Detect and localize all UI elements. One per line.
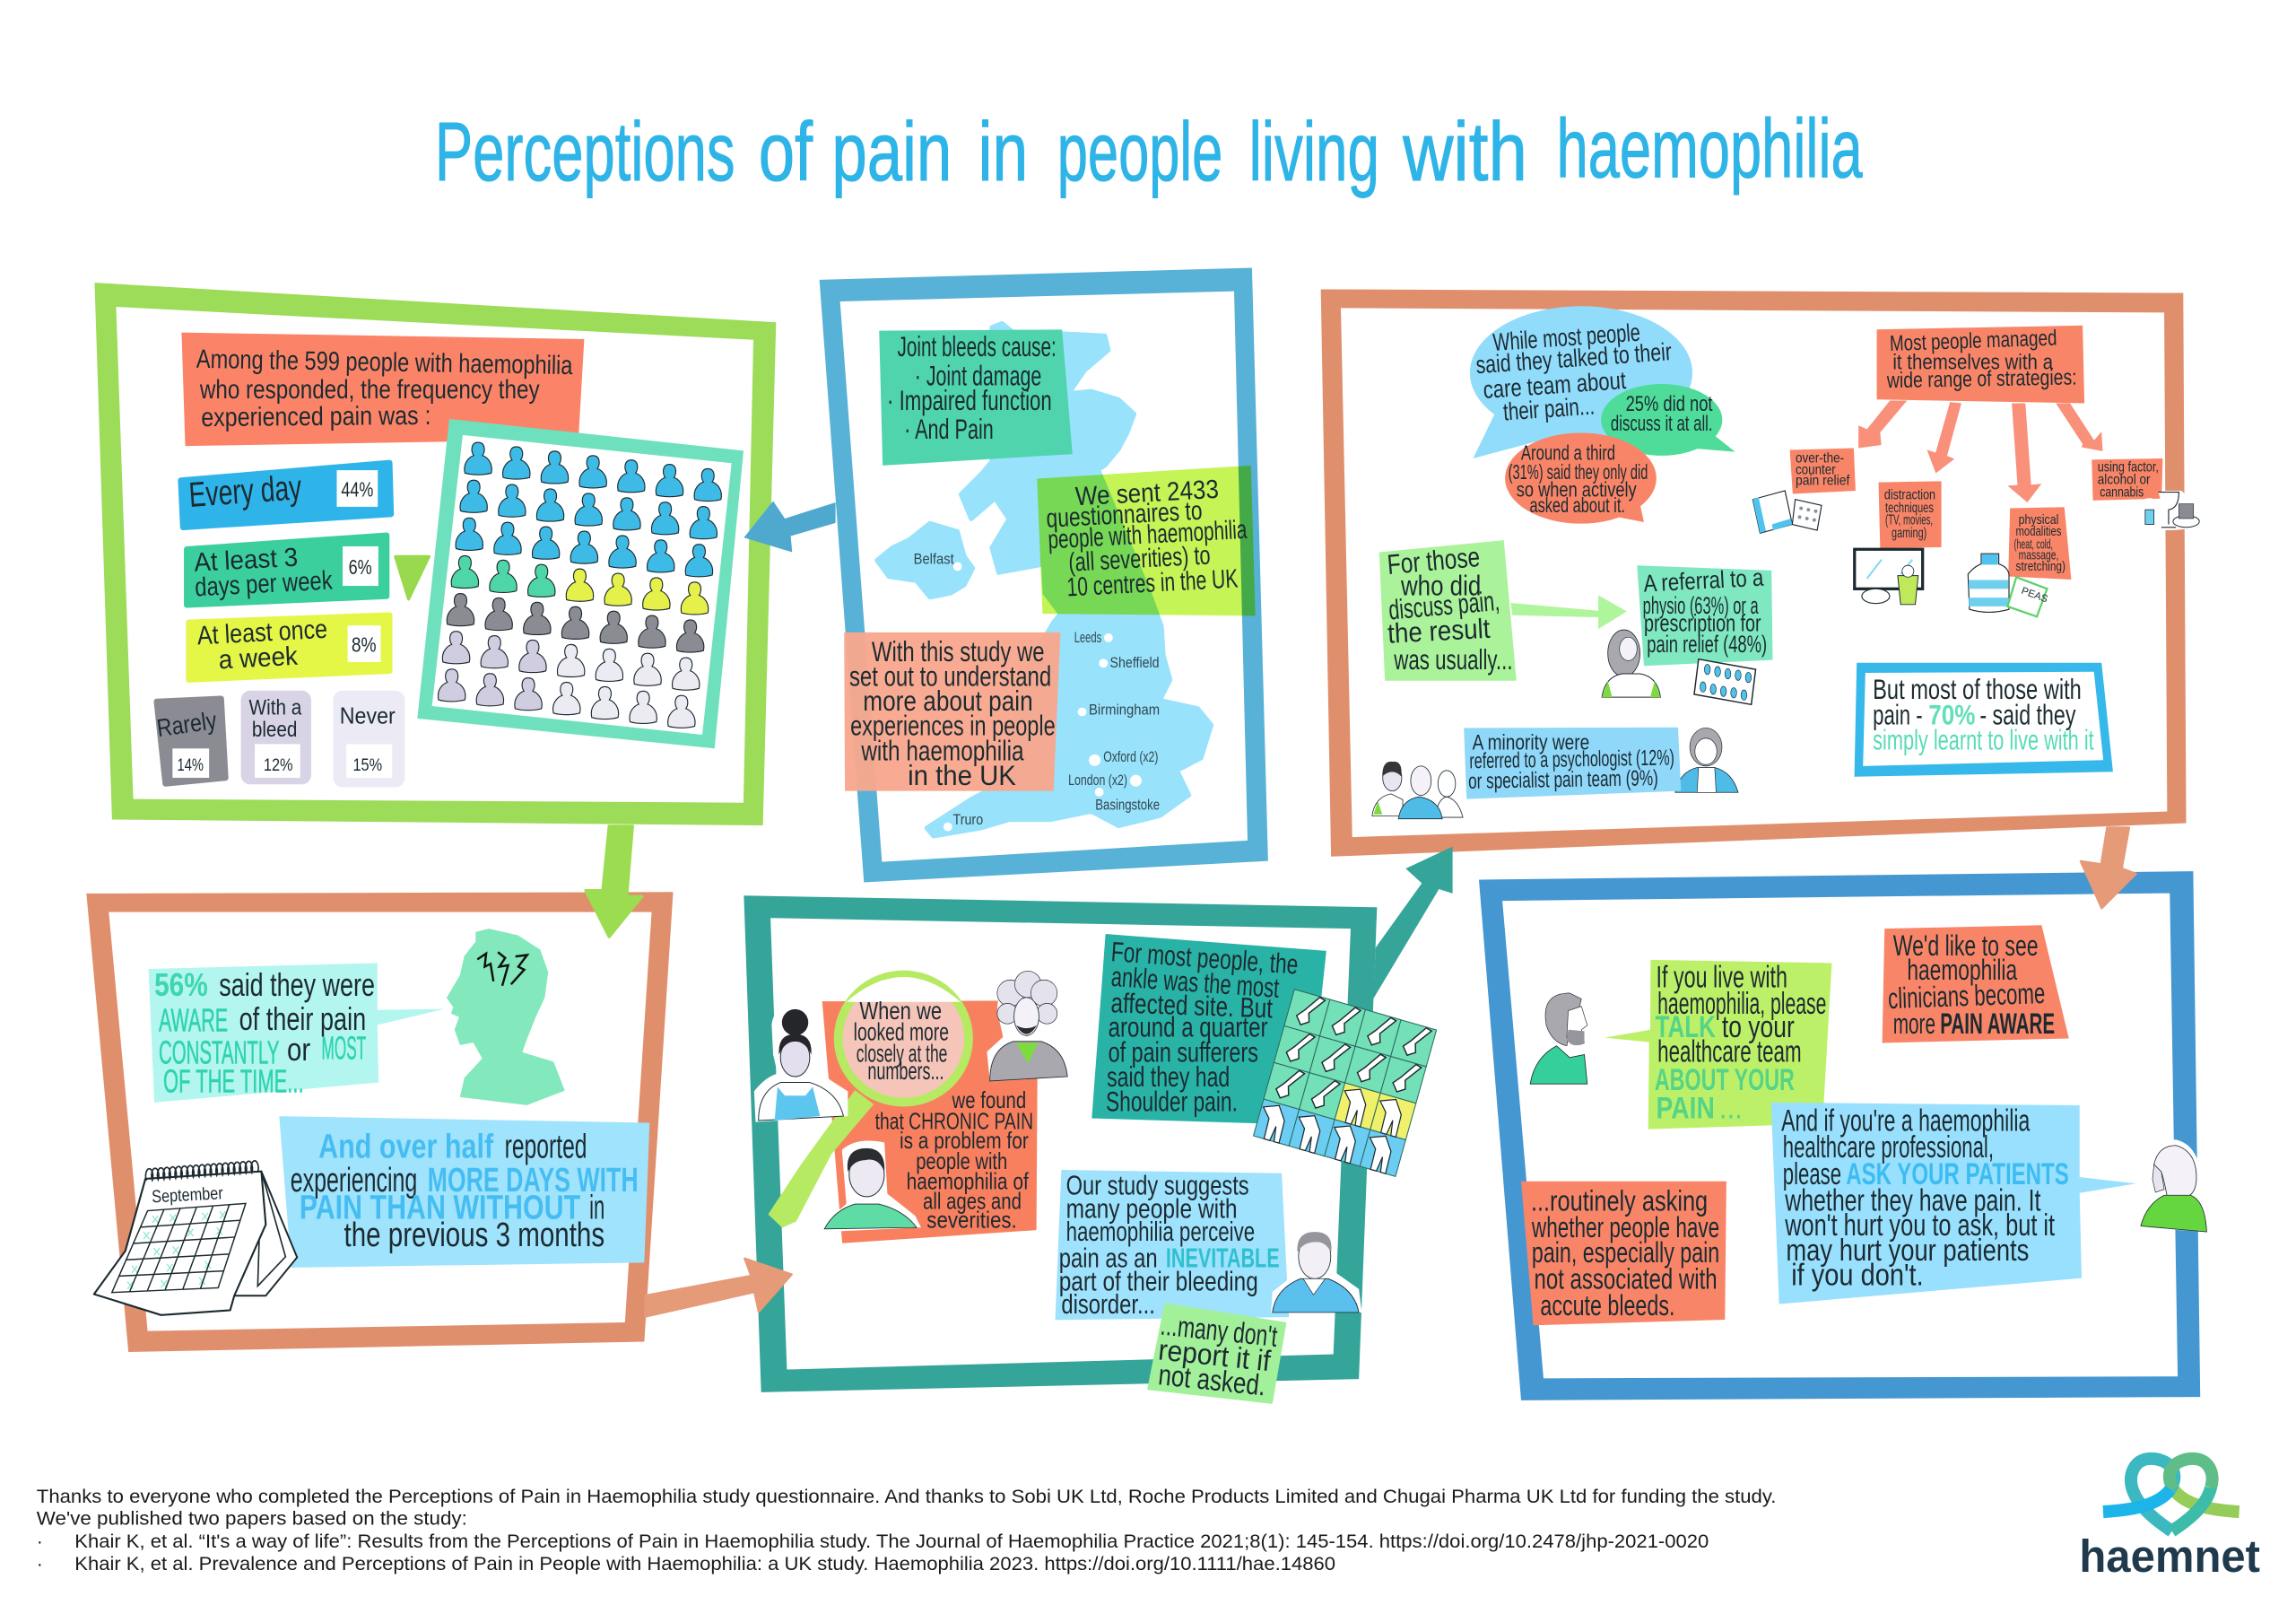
legend: never 15% — [335, 693, 403, 785]
map centres and labels: Oxford (x2) — [1103, 749, 1158, 765]
speech note: ask your patients: healthcare professional, — [1783, 1130, 1994, 1164]
speech bubble: a third when asked: Around a third — [1521, 441, 1615, 464]
speech note: talk to your healthcare team: PAIN — [1657, 1092, 1715, 1126]
note: questionnaires sent: (all severities) to — [1067, 540, 1211, 578]
note: chronic pain: people with — [916, 1147, 1007, 1174]
note: ankle most affected: For most people, the — [1110, 936, 1300, 981]
icon: medicine box and blister — [1752, 491, 1822, 533]
note: many don't report — [1147, 1303, 1286, 1404]
speech note: talk to your healthcare team — [1605, 960, 1831, 1130]
note: routinely asking: pain, especially pain — [1532, 1235, 1719, 1269]
note: for those who did discuss: For those — [1386, 541, 1481, 580]
footer: acknowledgements and references: · — [37, 1531, 43, 1552]
logo: haemnet: haemnet — [2079, 1531, 2260, 1582]
strategy: physical modalities: physical — [2019, 513, 2058, 528]
note: 56% aware of pain: AWARE — [159, 1001, 228, 1038]
note: chronic pain: all ages and — [923, 1187, 1022, 1214]
icon: magnifying glass: closely at the — [857, 1039, 947, 1067]
note: questionnaires sent — [1037, 466, 1256, 615]
speech bubble: 25% did not discuss — [1601, 384, 1735, 456]
note: study aim: in the UK — [908, 760, 1016, 791]
note: chronic pain: that CHRONIC PAIN — [875, 1107, 1033, 1134]
note: questionnaires sent: We sent 2433 — [1074, 475, 1220, 511]
speech bubble: most talked to care team: care team about — [1483, 366, 1627, 404]
strategy: distraction: distraction — [1884, 488, 1935, 503]
legend: rarely 14% — [155, 699, 225, 783]
note: minority referred: referred to a psychologist (12%) — [1469, 746, 1674, 773]
icon: magnifying glass: numbers... — [867, 1057, 944, 1085]
legend: every day 44%: Every day — [187, 468, 303, 515]
note: more days with pain: the previous 3 months — [344, 1216, 604, 1253]
strategy: factor alcohol cannabis: using factor, — [2098, 459, 2159, 475]
speech note: talk to your healthcare team: TALK — [1656, 1010, 1716, 1044]
strategy: physical modalities — [2008, 507, 2071, 580]
note: for those who did discuss: the result — [1387, 613, 1492, 650]
icon: vial wine plate — [2136, 491, 2201, 530]
note: 56% aware of pain: said they were — [219, 966, 375, 1003]
footer: acknowledgements and references: · — [37, 1554, 43, 1574]
small pointer triangle — [396, 556, 429, 599]
speech note: talk to your healthcare team: to your — [1722, 1010, 1795, 1044]
sticker: three healthcare workers — [1370, 759, 1467, 819]
note: referral to physio: physio (63%) or a — [1643, 592, 1759, 619]
note: 56% aware of pain: of their pain — [239, 1000, 366, 1037]
map centres and labels: Birmingham — [1089, 702, 1160, 719]
speech bubble: most talked to care team: While most people — [1492, 318, 1641, 356]
icon: hot water bottle and peas: PEAS — [2020, 586, 2049, 606]
chart: joints affected grid — [1254, 990, 1437, 1176]
icon: blister pack — [1694, 659, 1756, 704]
note: pain inevitable: haemophilia perceive — [1066, 1217, 1255, 1247]
note: ankle most affected: around a quarter — [1109, 1012, 1268, 1043]
map centres and labels: Leeds — [1074, 630, 1101, 646]
map centres and labels — [914, 552, 1160, 832]
sticker: woman in profile — [2138, 1139, 2206, 1232]
speech note: talk to your healthcare team: ABOUT YOUR — [1655, 1063, 1795, 1097]
note: joint bleeds cause: · And Pain — [904, 414, 994, 445]
title: with — [1402, 105, 1527, 198]
legend: rarely 14%: Rarely — [155, 706, 219, 742]
arrow: to factor alcohol cannabis — [2056, 403, 2102, 451]
note: referral to physio: pain relief (48%) — [1647, 631, 1767, 658]
note: chronic pain: haemophilia of — [907, 1168, 1029, 1195]
text: frequency intro: who responded, the frequency they — [199, 375, 540, 405]
title — [435, 102, 1863, 198]
note: referral to physio: A referral to a — [1643, 564, 1764, 598]
strategy: factor alcohol cannabis: cannabis — [2100, 484, 2144, 500]
strategy: physical modalities: massage, — [2019, 549, 2058, 563]
legend: with a bleed 12%: With a — [249, 697, 302, 720]
note: 56% aware of pain: OF THE TIME... — [163, 1062, 304, 1099]
note: 56% aware of pain: MOST — [322, 1029, 366, 1066]
note: more days with pain: reported — [505, 1128, 587, 1165]
sticker: man in blue sweater — [1271, 1229, 1361, 1313]
sticker: man with curly hair — [987, 970, 1070, 1081]
note: ankle most affected: Shoulder pain. — [1106, 1086, 1238, 1118]
logo: haemnet — [2079, 1459, 2260, 1582]
note: minority referred: or specialist pain team (9%) — [1468, 766, 1658, 794]
arrow: chronic pain to talking — [1373, 847, 1453, 999]
note: more days with pain: MORE DAYS WITH — [428, 1161, 639, 1199]
panel: pain frequency — [94, 283, 776, 825]
speech note: ask your patients: won't hurt you to ask, but it — [1784, 1208, 2055, 1243]
callout: 70% learnt to live with it: pain - — [1873, 699, 1923, 730]
legend: every day 44% — [181, 463, 391, 528]
note: ankle most affected: affected site. But — [1110, 987, 1274, 1025]
note: joint bleeds cause: · Joint damage — [915, 360, 1041, 391]
note: ankle most affected: said they had — [1107, 1061, 1230, 1093]
panel: awareness of pain — [86, 892, 674, 1352]
note: more days with pain — [279, 1116, 649, 1268]
speech bubble: 25% did not discuss: 25% did not — [1626, 392, 1713, 416]
icon: hot water bottle and peas — [1968, 554, 2049, 616]
arrow: talking to call to action — [2081, 827, 2136, 908]
legend: at least 3 days per week 6% — [187, 536, 387, 605]
note: self-managed strategies: it themselves with a — [1892, 350, 2053, 374]
note: routinely asking: ...routinely asking — [1531, 1184, 1708, 1217]
strategy: distraction — [1879, 481, 1942, 548]
map centres and labels: Truro — [953, 812, 983, 828]
arrow: study to frequency — [744, 501, 836, 553]
note: 56% aware of pain: 56% — [154, 966, 208, 1003]
note: referral to physio: prescription for — [1644, 610, 1761, 637]
note: pain inevitable: INEVITABLE — [1166, 1244, 1280, 1274]
note: referral to physio — [1637, 564, 1772, 666]
legend: at least 3 days per week 6%: days per week — [194, 565, 334, 602]
legend: with a bleed 12%: bleed — [252, 719, 297, 742]
note: study aim: more about pain — [863, 685, 1033, 717]
note: more days with pain: in — [589, 1188, 604, 1226]
map centres and labels: Sheffield — [1110, 655, 1160, 671]
title: haemophilia — [1557, 102, 1863, 196]
strategy: distraction: (TV, movies, — [1885, 512, 1933, 528]
speech bubble: a third when asked: asked about it. — [1529, 493, 1625, 517]
icon: September calendar: September — [152, 1183, 224, 1207]
note: minority referred: A minority were — [1473, 730, 1589, 755]
strategy: physical modalities: modalities — [2016, 525, 2061, 539]
note: clinicians pain aware — [1883, 925, 2069, 1042]
text: frequency intro: experienced pain was : — [201, 401, 431, 432]
note: pain inevitable: pain as an — [1059, 1244, 1158, 1274]
arrow: to over-the-counter — [1858, 401, 1907, 448]
panel: study and UK map — [820, 267, 1268, 883]
icon: magnifying glass: When we — [859, 997, 942, 1025]
note: study aim: With this study we — [872, 636, 1045, 667]
speech note: ask your patients: ASK YOUR PATIENTS — [1846, 1157, 2069, 1191]
title: in — [978, 105, 1028, 198]
note: routinely asking: not associated with — [1535, 1262, 1718, 1295]
legend: every day 44%: 44% — [341, 477, 373, 501]
legend: at least 3 days per week 6%: At least 3 — [193, 543, 299, 578]
note: clinicians pain aware: We'd like to see — [1893, 929, 2039, 962]
note: pain inevitable — [1055, 1170, 1289, 1320]
note: many don't report: ...many don't — [1159, 1308, 1279, 1353]
note: 56% aware of pain — [149, 963, 444, 1103]
note: routinely asking: accute bleeds. — [1540, 1288, 1674, 1322]
note: minority referred — [1464, 728, 1681, 799]
note: clinicians pain aware: more — [1893, 1007, 1935, 1040]
speech note: ask your patients: may hurt your patients — [1786, 1234, 2029, 1268]
strategy: over the counter: pain relief — [1796, 473, 1850, 488]
note: more days with pain: experiencing — [291, 1161, 417, 1199]
panel: talking about pain and strategies — [1321, 289, 2201, 857]
note: joint bleeds cause: Joint bleeds cause: — [897, 331, 1057, 362]
note: ankle most affected — [1091, 934, 1326, 1125]
speech bubble: a third when asked: so when actively — [1517, 477, 1637, 501]
sticker: woman with hair bun — [754, 1007, 848, 1122]
text: frequency intro: Among the 599 people with haemophilia — [196, 345, 573, 380]
title: pain — [831, 105, 952, 198]
chart: pictogram of 49 people — [417, 419, 744, 748]
note: clinicians pain aware: PAIN AWARE — [1940, 1007, 2055, 1040]
footer: acknowledgements and references: Thanks to everyone who completed the Perceptions of Pain in Haemophilia study questionnaire. And thanks to Sobi UK Ltd, Roche Products Limited and Chugai Pharma UK Ltd for funding the study. — [37, 1487, 1776, 1507]
legend: at least 3 days per week 6%: 6% — [349, 555, 372, 579]
legend: at least once a week 8%: At least once — [196, 615, 328, 650]
map centres and labels: London (x2) — [1068, 772, 1127, 789]
note: questionnaires sent: 10 centres in the UK — [1066, 564, 1239, 602]
legend: with a bleed 12% — [243, 693, 309, 782]
callout: 70% learnt to live with it: But most of those with — [1873, 674, 2082, 705]
speech bubble: most talked to care team — [1470, 306, 1692, 458]
sticker: man with short dark hair — [824, 1140, 921, 1232]
note: routinely asking — [1521, 1182, 1726, 1325]
legend: with a bleed 12%: 12% — [264, 755, 293, 775]
icon: magnifying glass — [768, 975, 969, 1227]
legend: at least once a week 8%: a week — [218, 641, 299, 675]
note: chronic pain: we found — [952, 1086, 1026, 1113]
speech note: talk to your healthcare team: If you live with — [1657, 960, 1787, 994]
legend: never 15%: 15% — [352, 755, 382, 775]
note: more days with pain: PAIN THAN WITHOUT — [300, 1188, 580, 1226]
note: clinicians pain aware: clinicians become — [1887, 976, 2046, 1015]
note: many don't report: not asked. — [1157, 1357, 1267, 1401]
note: questionnaires sent: people with haemophilia — [1048, 515, 1248, 554]
note: study aim: with haemophilia — [861, 735, 1024, 766]
arrow: to physical modalities — [2007, 403, 2041, 502]
note: study aim — [844, 632, 1060, 791]
panel: chronic pain findings — [744, 895, 1377, 1404]
note: pain inevitable: part of their bleeding — [1059, 1267, 1258, 1296]
icon: September calendar — [94, 1161, 297, 1315]
strategy: over the counter: counter — [1796, 462, 1836, 477]
title: of — [759, 105, 813, 198]
arrow: to referral — [1510, 595, 1627, 629]
note: chronic pain: is a problem for — [900, 1127, 1029, 1154]
legend: at least once a week 8%: 8% — [352, 633, 377, 657]
strategy: physical modalities: (heat, cold, — [2014, 537, 2053, 552]
speech bubble: a third when asked — [1505, 432, 1657, 524]
sticker: physio in hijab — [1599, 627, 1664, 699]
note: chronic pain: severities. — [926, 1207, 1017, 1233]
icon: head silhouette with pain — [447, 929, 565, 1105]
footer: acknowledgements and references — [37, 1487, 1776, 1574]
map centres and labels: Belfast — [914, 552, 954, 568]
speech note: talk to your healthcare team: ... — [1719, 1092, 1743, 1126]
note: self-managed strategies: Most people managed — [1890, 327, 2057, 356]
speech bubble: 25% did not discuss: discuss it at all. — [1611, 412, 1713, 436]
note: for those who did discuss: discuss pain, — [1387, 585, 1500, 626]
speech bubble: a third when asked: (31%) said they only did — [1509, 460, 1648, 484]
title: Perceptions — [435, 105, 735, 198]
callout: 70% learnt to live with it: - said they — [1979, 699, 2076, 730]
arrow: to distraction — [1927, 402, 1961, 474]
speech note: talk to your healthcare team: haemophilia, please — [1657, 987, 1826, 1021]
arrow: awareness to chronic pain — [645, 1259, 792, 1317]
legend: rarely 14%: 14% — [178, 755, 204, 775]
speech note: talk to your healthcare team: healthcare team — [1657, 1034, 1802, 1069]
title: living — [1249, 105, 1379, 198]
note: self-managed strategies: wide range of strategies: — [1886, 365, 2077, 393]
legend: never 15%: Never — [340, 702, 396, 729]
arrow: frequency to awareness — [586, 826, 642, 937]
callout: 70% learnt to live with it: simply learnt to live with it — [1873, 724, 2094, 755]
title: people — [1057, 105, 1222, 198]
speech note: ask your patients: please — [1783, 1157, 1841, 1191]
footer: acknowledgements and references: Khair K, et al. “It's a way of life”: Results from the Perceptions of Pain in Haemophilia study. The Journal of Haemophilia Practice 2021;8(1): 145-154. https://doi.org/10.2478/jhp-2021-0020 — [74, 1531, 1709, 1552]
note: 56% aware of pain: CONSTANTLY — [159, 1034, 279, 1070]
note: chronic pain — [822, 1000, 1038, 1243]
note: study aim: experiences in people — [850, 711, 1056, 742]
note: study aim: set out to understand — [849, 661, 1051, 693]
note: pain inevitable: Our study suggests — [1066, 1172, 1249, 1201]
speech note: ask your patients: if you don't. — [1791, 1258, 1924, 1292]
note: many don't report: report it if — [1157, 1332, 1273, 1377]
map centres and labels: Basingstoke — [1095, 797, 1160, 813]
speech bubble: most talked to care team: their pain... — [1502, 392, 1596, 426]
callout: 70% learnt to live with it: 70% — [1928, 699, 1975, 730]
strategy: distraction: techniques — [1885, 501, 1934, 516]
note: ankle most affected: of pain sufferers — [1109, 1036, 1258, 1068]
speech bubble: most talked to care team: said they talked to their — [1474, 337, 1673, 379]
note: pain inevitable: many people with — [1066, 1194, 1238, 1224]
note: routinely asking: whether people have — [1531, 1210, 1719, 1243]
legend: at least once a week 8% — [189, 615, 389, 680]
footer: acknowledgements and references: We've published two papers based on the study: — [37, 1509, 467, 1530]
icon: TV popcorn controller — [1855, 549, 1923, 605]
text: frequency intro — [181, 333, 584, 446]
sticker: bearded man — [1530, 990, 1593, 1086]
sticker: woman with glasses — [1672, 725, 1741, 794]
note: more days with pain: And over half — [318, 1128, 494, 1165]
map: United Kingdom — [877, 323, 1212, 836]
note: joint bleeds cause — [879, 329, 1073, 466]
note: ankle most affected: ankle was the most — [1110, 961, 1281, 1004]
note: self-managed strategies — [1877, 326, 2084, 403]
footer: acknowledgements and references: Khair K, et al. Prevalence and Perceptions of Pain in People with Haemophilia: a UK study. Haemophilia 2023. https://doi.org/10.1111/hae.14860 — [74, 1554, 1335, 1574]
note: clinicians pain aware: haemophilia — [1907, 953, 2018, 986]
icon: magnifying glass: looked more — [854, 1018, 949, 1046]
speech note: ask your patients: And if you're a haemophilia — [1781, 1103, 2031, 1138]
strategy: physical modalities: stretching) — [2016, 560, 2066, 574]
panel: call to action — [1479, 871, 2206, 1400]
strategy: distraction: gaming) — [1892, 526, 1926, 541]
strategy: over the counter: over-the- — [1796, 450, 1844, 466]
callout: 70% learnt to live with it — [1855, 663, 2113, 777]
speech note: ask your patients: whether they have pain. It — [1784, 1184, 2041, 1218]
note: joint bleeds cause: · Impaired function — [887, 385, 1052, 416]
strategy: factor alcohol cannabis: alcohol or — [2098, 472, 2151, 487]
note: for those who did discuss — [1379, 540, 1517, 681]
strategy: factor alcohol cannabis — [2092, 458, 2162, 501]
note: pain inevitable: disorder... — [1061, 1290, 1155, 1320]
note: for those who did discuss: was usually... — [1394, 644, 1513, 676]
strategy: over the counter — [1790, 448, 1856, 494]
note: for those who did discuss: who did — [1400, 570, 1481, 601]
note: questionnaires sent: questionnaires to — [1046, 496, 1203, 534]
speech note: ask your patients — [1771, 1103, 2136, 1304]
note: 56% aware of pain: or — [287, 1031, 310, 1068]
